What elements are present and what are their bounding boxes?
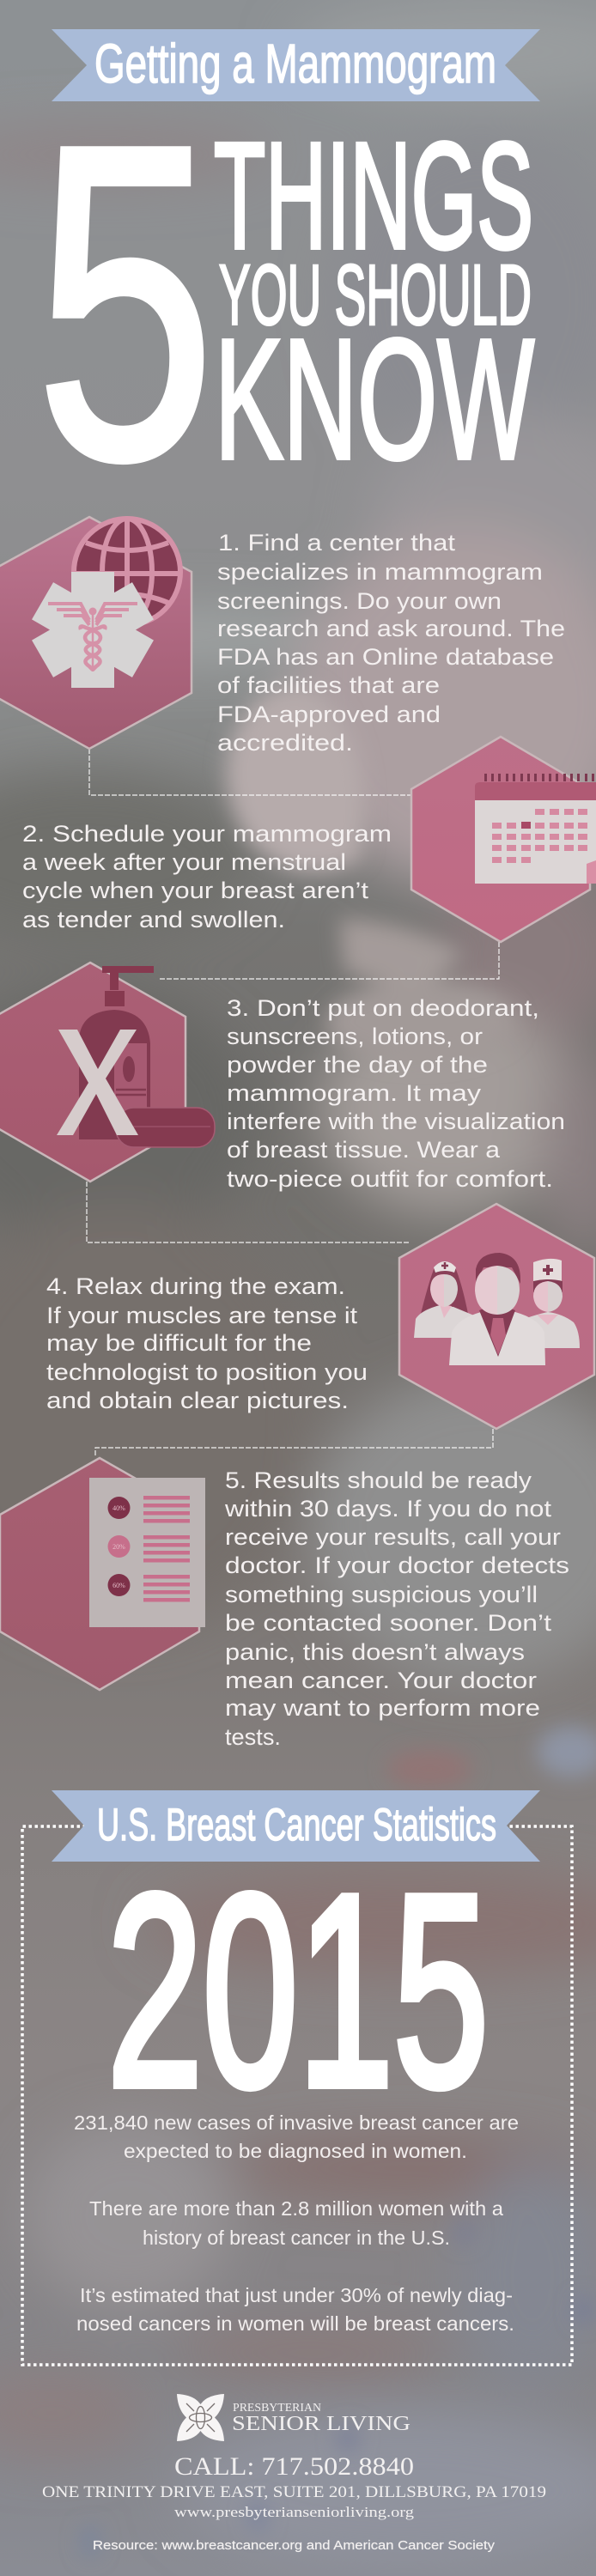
text: step 5: 5. Results should be ready	[225, 1467, 532, 1493]
hexagon 3	[0, 963, 185, 1182]
text: step 1: 1. Find a center that	[218, 530, 456, 556]
text: step 3	[227, 995, 565, 1192]
text: step 3: mammogram. It may	[227, 1080, 482, 1106]
text: step 4: If your muscles are tense it	[46, 1303, 358, 1328]
contact details: CALL: 717.502.8840	[174, 2452, 414, 2481]
stat text: history of breast cancer in the U.S.	[143, 2227, 450, 2249]
icon: globe	[74, 519, 180, 625]
connector lines between steps	[87, 749, 499, 1455]
hexagon 4	[399, 1204, 594, 1429]
ribbon: U.S. Breast Cancer Statistics	[52, 1790, 540, 1862]
panel: step 2	[22, 737, 596, 942]
panel: statistics	[22, 1790, 572, 2365]
stat text: 231,840 new cases of invasive breast cancer are	[74, 2111, 519, 2134]
text: step 5: something suspicious you’ll	[225, 1582, 538, 1607]
panel: step 1	[0, 517, 565, 756]
stat text: expected to be diagnosed in women.	[124, 2140, 467, 2162]
icon: medical team	[414, 1253, 580, 1365]
text: step 5: doctor. If your doctor detects	[225, 1552, 569, 1578]
stat text: It’s estimated that just under 30% of newly diag-	[80, 2284, 513, 2306]
text: step 4: 4. Relax during the exam.	[46, 1273, 345, 1299]
text: step 4	[46, 1273, 368, 1413]
text: step 1: specializes in mammogram	[217, 559, 543, 585]
icon: star of life with caduceus	[32, 572, 154, 688]
footer	[42, 2394, 546, 2553]
text: step 5	[224, 1467, 569, 1750]
text: step 5: receive your results, call your	[225, 1524, 561, 1550]
title: 5 Things You Should Know	[36, 53, 534, 552]
stat text: There are more than 2.8 million women with a	[89, 2197, 503, 2220]
text: step 1: screenings. Do your own	[217, 588, 502, 614]
logo: wordmark: PRESBYTERIAN	[233, 2402, 321, 2415]
text: step 3: sunscreens, lotions, or	[227, 1024, 483, 1049]
text: step 1: FDA-approved and	[217, 702, 441, 727]
text: step 2: cycle when your breast aren’t	[22, 878, 369, 903]
logo: wordmark: SENIOR LIVING	[232, 2413, 411, 2435]
text: step 2: 2. Schedule your mammogram	[22, 821, 392, 847]
text: step 4: technologist to position you	[46, 1359, 368, 1385]
text: step 4: may be difficult for the	[46, 1330, 312, 1356]
text: step 3: 3. Don’t put on deodorant,	[227, 995, 539, 1021]
hexagon 5	[0, 1458, 199, 1690]
icon: lotion bottle and soap	[79, 966, 215, 1147]
contact details: ONE TRINITY DRIVE EAST, SUITE 201, DILLSBURG, PA 17019	[42, 2483, 546, 2501]
icon: calendar	[475, 774, 596, 884]
stat text	[74, 2111, 519, 2335]
text: step 5: within 30 days. If you do not	[224, 1496, 552, 1522]
icon: results report	[89, 1478, 205, 1627]
text: step 5: be contacted sooner. Don’t	[225, 1610, 552, 1636]
panel: step 4	[46, 1204, 594, 1429]
big numeral 5: 5	[36, 53, 215, 552]
text: step 1	[217, 530, 565, 756]
ribbon: Getting a Mammogram	[52, 29, 540, 101]
text: step 5: may want to perform more	[225, 1695, 540, 1721]
panel: step 3	[0, 963, 565, 1192]
resource line: Resource: www.breastcancer.org and American Cancer Society	[93, 2538, 496, 2553]
text: step 1: accredited.	[217, 730, 353, 756]
icon: results report: 20%	[113, 1543, 125, 1551]
text: step 3: interfere with the visualization	[227, 1109, 565, 1134]
text: step 5: mean cancer. Your doctor	[225, 1668, 537, 1693]
right nurse	[515, 1259, 580, 1348]
left nurse	[414, 1261, 474, 1338]
icon: results report: 40%	[113, 1504, 125, 1512]
text: step 1: research and ask around. The	[217, 616, 565, 641]
text: step 5: tests.	[225, 1724, 281, 1750]
text: step 1: FDA has an Online database	[217, 644, 554, 670]
dotted frame	[22, 1826, 572, 2365]
contact details: www.presbyterianseniorliving.org	[174, 2504, 415, 2520]
hexagon 1	[0, 517, 192, 749]
text: step 4: and obtain clear pictures.	[46, 1388, 349, 1413]
text: step 5: panic, this doesn’t always	[225, 1639, 525, 1665]
text: step 3: of breast tissue. Wear a	[227, 1137, 501, 1163]
text: step 2: a week after your menstrual	[22, 849, 346, 875]
icon: results report: 60%	[113, 1582, 125, 1589]
text: step 3: powder the day of the	[227, 1052, 488, 1078]
text: step 2: as tender and swollen.	[22, 907, 285, 933]
text: step 2	[22, 821, 392, 933]
contact details	[42, 2452, 546, 2520]
icon: X mark	[57, 1030, 138, 1135]
hexagon 2	[411, 737, 590, 942]
logo: flower mark	[177, 2394, 224, 2441]
panel: step 5	[0, 1458, 569, 1750]
text: step 3: two-piece outfit for comfort.	[227, 1166, 553, 1192]
lead doctor	[449, 1253, 545, 1365]
logo: wordmark	[232, 2402, 411, 2435]
stat text: nosed cancers in women will be breast cancers.	[76, 2312, 514, 2335]
text: step 1: of facilities that are	[217, 672, 440, 698]
